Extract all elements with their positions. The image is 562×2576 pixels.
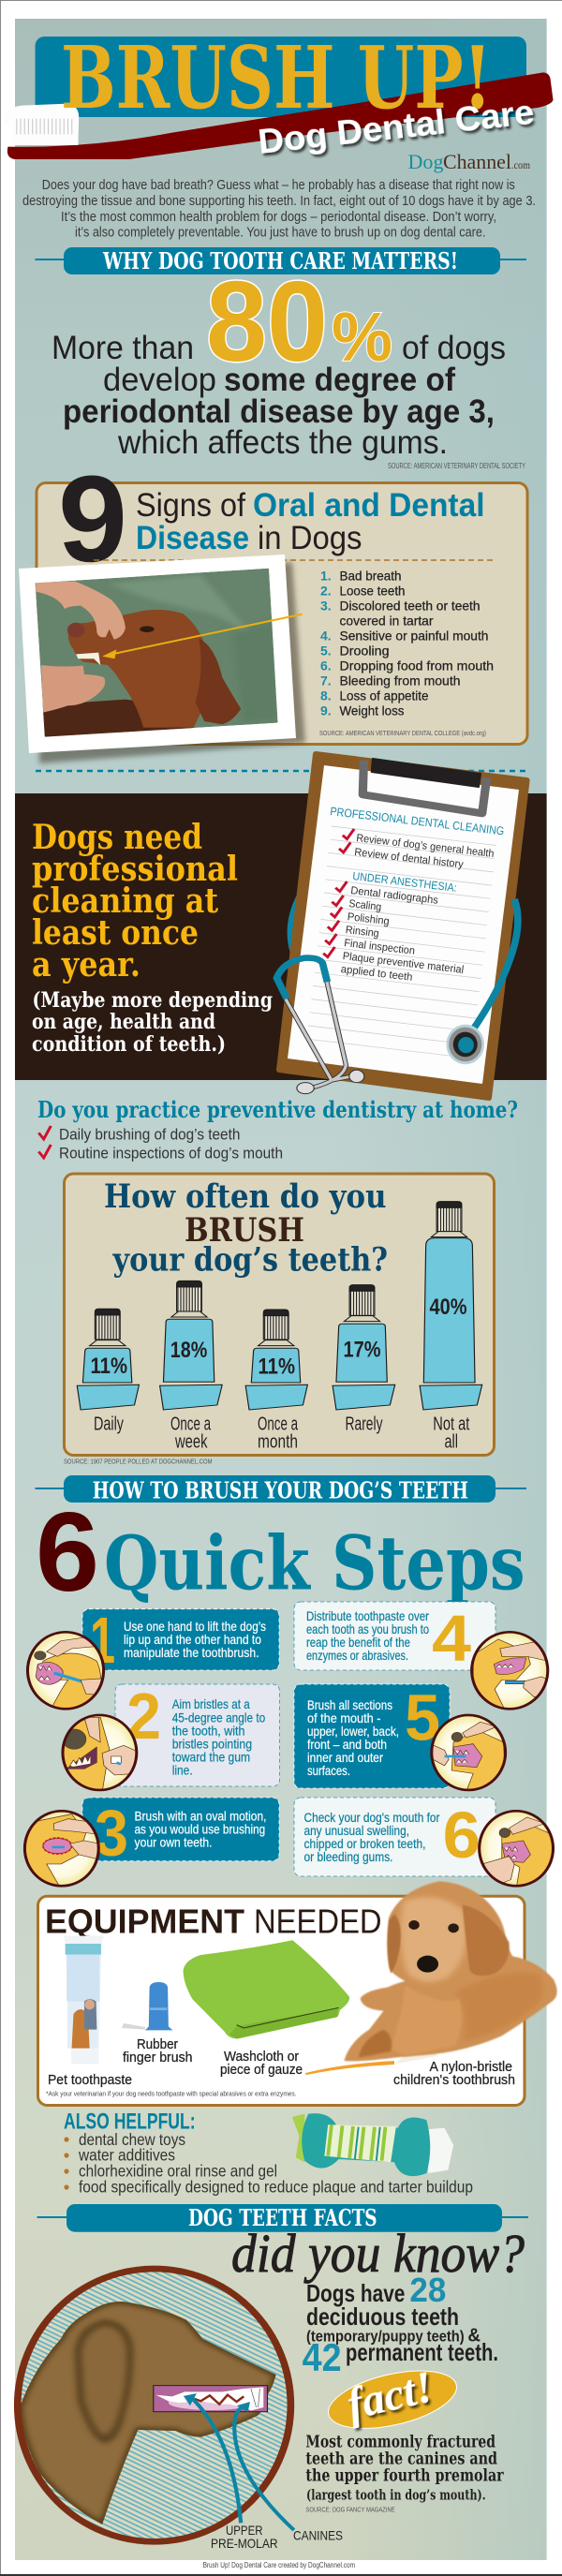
chart labels: Rarely [345,1414,382,1435]
chart labels [94,1414,470,1452]
list of signs: 4. [320,628,332,643]
statistic: 80 percent: which affects the gums. [117,424,448,461]
icon: step 4 dog [471,1632,549,1711]
step 4: Distribute toothpaste over [306,1608,429,1623]
step 3: as you would use brushing [135,1822,265,1837]
checklist text: Dental radiographs [350,885,439,907]
icon: step 1 dog [27,1632,106,1711]
text block: also helpful: water additives [78,2146,175,2165]
dashed divider [36,770,526,772]
logo: DogChannel.com: Dog [408,150,444,173]
mouth and teeth [154,2386,267,2412]
step 6: 6 [443,1799,481,1872]
heading: did you know: did you know? [231,2223,525,2284]
text block: also helpful: ALSO HELPFUL: [64,2109,196,2134]
equipment labels: finger brush [123,2050,193,2065]
icons: brushing illustrations [22,1632,555,1889]
icon: stethoscope tube behind clipboard [290,897,300,955]
list of signs: Loose teeth [339,583,405,598]
step 2: the tooth, with [172,1723,244,1738]
list of signs: 5. [320,643,332,658]
tooth labels: CANINES [293,2528,343,2543]
text: yearly cleaning message: condition of teeth.) [32,1032,226,1057]
step 4: each tooth as you brush to [306,1621,429,1636]
icon: toothbrush [4,72,554,159]
footer credit: Brush Up! Dog Dental Care created by DogChannel.com [203,2561,355,2569]
text block: also helpful: food specifically designed to reduce plaque and tarter buildup [79,2178,473,2197]
list of signs: 6. [320,658,332,673]
text block: fractured teeth: (largest tooth in dog’s mouth). [306,2487,486,2503]
step 6: or bleeding gums. [303,1849,393,1864]
icon: dental chew toy [292,2113,453,2176]
source note: SOURCE: DOG FANCY MAGAZINE [305,2506,395,2514]
ruled lines [307,826,496,1059]
step 6: chipped or broken teeth, [303,1836,425,1851]
list of signs: Dropping food from mouth [339,658,494,673]
icon: step 6 dog [479,1811,555,1889]
logo: DogChannel.com: Channel [443,150,511,173]
panel heading: EQUIPMENT [45,1902,244,1940]
step 4: 4 [432,1602,471,1675]
chart heading: BRUSH [185,1211,304,1250]
text block: also helpful [64,2109,473,2197]
title band [36,37,526,117]
step 3: your own teeth. [135,1835,212,1850]
panel: nine signs [37,450,527,744]
text block: also helpful: dental chew toys [79,2130,185,2149]
step 1: Use one hand to lift the dog’s [124,1619,266,1634]
text block: teeth counts: permanent teeth. [346,2338,498,2366]
text block: fractured teeth: teeth are the canines and [305,2450,497,2469]
intro text [22,178,536,240]
checklist: home dentistry: Daily brushing of dog’s teeth [59,1126,240,1144]
step 1: manipulate the toothbrush. [124,1645,259,1660]
text block: teeth counts: 42 [303,2335,342,2379]
step 1: lip up and the other hand to [124,1632,261,1647]
list of signs: 8. [320,688,332,703]
chart labels: month [258,1431,298,1452]
icon: step 5 dog [430,1714,506,1792]
text: yearly cleaning message: on age, health and [32,1010,215,1034]
photo: puppy [344,1881,557,2061]
text block: teeth counts: Dogs have [306,2279,405,2307]
statistic: 80 percent: of dogs [402,330,506,366]
text: yearly cleaning message [32,818,273,1057]
red check marks [323,829,354,957]
text: yearly cleaning message: Dogs need [32,818,202,857]
arrows: pointing to teeth [185,2394,294,2530]
chart labels: Once a [258,1414,299,1435]
text block: teeth counts: (temporary/puppy teeth) [306,2327,465,2345]
checklist text: applied to teeth [340,964,413,984]
step 3 [82,1797,279,1870]
heading text: Disease [136,520,249,556]
heading text: Signs of [136,487,245,524]
checklist: home dentistry [38,1126,283,1162]
text block: fractured teeth: the upper fourth premolar [305,2467,504,2486]
tube: once a month 11 percent: 11% [259,1355,295,1379]
illustration: dog profile with teeth [18,2269,294,2541]
checklist text: Polishing [347,911,390,927]
tube: rarely 17 percent: 17% [343,1338,380,1362]
source note: SOURCE: AMERICAN VETERINARY DENTAL COLLEGE (avdc.org) [319,729,486,737]
list of signs: 9. [320,703,332,718]
equipment labels: piece of gauze [220,2063,303,2078]
icon: stethoscope [276,899,518,1094]
step 6: any unusual swelling, [303,1823,409,1838]
list of signs: Discolored teeth or teeth [339,598,480,613]
tooth labels [211,2523,343,2551]
panel heading: NEEDED [254,1902,382,1940]
step 6 [294,1798,495,1876]
text block: fractured teeth [305,2434,504,2503]
panel heading [45,1902,382,1940]
tube: not at all 40 percent: 40% [429,1295,466,1320]
step 5: upper, lower, back, [307,1724,399,1739]
panel: how often chart [64,1174,495,1456]
heading number 9: 9 [58,450,127,587]
icon: step 2 dog [61,1714,138,1792]
header: title with toothbrush [4,27,554,161]
intro text: it’s also completely preventable. You just have to brush up on dog dental care. [75,225,485,240]
badge: fact [323,2361,462,2439]
tube: daily 11 percent: 11% [90,1354,127,1379]
logo: DogChannel.com [408,150,531,173]
statistic: 80 percent [52,258,506,461]
tube: daily 11 percent [77,1309,139,1410]
equipment labels: children's toothbrush [393,2073,515,2088]
statistic: 80 percent: some degree of [224,362,455,398]
list of signs: Bad breath [339,568,401,583]
chart heading: your dog’s teeth? [112,1241,388,1280]
illustration: clipboard with checklist [279,754,527,1098]
equipment labels: Rubber [137,2037,178,2052]
statistic: 80 percent: % [332,298,392,376]
icon: children's toothbrush [304,2044,437,2075]
section heading: why dog tooth care matters: WHY DOG TOOTH CARE MATTERS! [102,247,458,274]
section heading: how to brush: HOW TO BRUSH YOUR DOG’S TEETH [93,1476,468,1503]
step 5 [294,1681,450,1788]
statistic: 80 percent: periodontal disease by age 3, [63,393,495,430]
logo: DogChannel.com: .com [511,158,531,171]
tube: rarely 17 percent [333,1285,395,1410]
text block: teeth counts: deciduous teeth [306,2302,459,2331]
heading text: in Dogs [258,520,362,556]
step 2: Aim bristles at a [172,1696,250,1711]
badge: fact: fact! [343,2361,437,2430]
heading text [136,487,485,556]
tube: once a month 11 percent [245,1310,307,1410]
list of signs [320,568,494,718]
arrow: pointing to discolored tooth [102,614,303,659]
list of signs: covered in tartar [339,613,434,628]
text: yearly cleaning message: least once [32,913,199,953]
list of signs: 2. [320,583,332,598]
checklist text: UNDER ANESTHESIA: [352,869,458,895]
chart heading [104,1177,388,1280]
photo: dog having teeth inspected [19,555,305,763]
step 2 [115,1680,279,1786]
equipment labels [48,2037,515,2088]
step 2: toward the gum [172,1749,250,1764]
panel: equipment needed [37,1881,557,2106]
footnote: *Ask your veterinarian if your dog needs toothpaste with special abrasives or extra enzymes. [46,2091,297,2097]
step 4 [294,1602,495,1675]
text: yearly cleaning message: a year. [32,945,140,985]
equipment labels: Pet toothpaste [48,2073,132,2088]
list of signs: 7. [320,673,332,688]
checklist text: Review of dog’s general health [356,833,495,860]
step 2: line. [172,1762,193,1777]
chart heading: How often do you [104,1177,386,1216]
checklist text: Rinsing [345,925,379,940]
text block: teeth counts: 28 [409,2271,446,2309]
checklist text: Final inspection [344,938,416,957]
step 6: Check your dog's mouth for [303,1810,440,1825]
tooth labels: PRE-MOLAR [211,2536,278,2551]
list of signs: Sensitive or painful mouth [339,628,489,643]
tooth labels: UPPER [226,2523,262,2538]
list of signs: Bleeding from mouth [339,673,461,688]
statistic: 80 percent: develop [103,362,216,398]
chart labels: Not at [433,1414,470,1435]
text block: fractured teeth: Most commonly fractured [305,2434,495,2452]
heading: six quick steps: 6 [36,1489,99,1615]
step 2: 45-degree angle to [172,1710,265,1725]
step 5: surfaces. [307,1763,350,1778]
list of signs: Loss of appetite [339,688,429,703]
step 1 [82,1604,279,1677]
step 5: 5 [405,1681,440,1754]
step 4: enzymes or abrasives. [306,1648,408,1663]
source note: SOURCE: 1907 PEOPLE POLLED AT DOGCHANNEL.COM [64,1458,212,1466]
step 5: of the mouth - [307,1710,381,1725]
checklist: home dentistry: Routine inspections of dog’s mouth [59,1145,283,1162]
text block: also helpful: chlorhexidine oral rinse and gel [79,2162,277,2181]
step 3: 3 [95,1797,128,1870]
checklist text [330,805,505,984]
checklist text: PROFESSIONAL DENTAL CLEANING [330,805,505,837]
icon: step 3 dog [22,1811,100,1889]
text block: teeth counts [303,2271,498,2379]
step 5: inner and outer [307,1750,383,1765]
icon: pet toothpaste tube [64,1936,104,2064]
step 2: 2 [126,1680,161,1753]
icon: rubber finger brush [122,1982,172,2030]
step 1: 1 [90,1604,115,1677]
checklist text: Review of dental history [354,847,464,870]
bar chart: toothpaste tubes [77,1202,482,1452]
checklist text: Plaque preventive material [342,951,465,976]
text block: teeth counts: & [467,2325,481,2346]
chart labels: Daily [94,1414,124,1435]
panel: professional cleaning band [15,793,547,1080]
chart labels: week [174,1431,208,1452]
tube: not at all 40 percent [420,1202,482,1410]
list of signs: Drooling [339,643,390,658]
step 5: Brush all sections [307,1697,392,1712]
step 3: Brush with an oval motion, [135,1808,266,1823]
subtitle: Dog Dental Care [256,93,536,161]
checklist text: Scaling [348,898,382,913]
chart labels: Once a [170,1414,212,1435]
list of signs: 1. [320,568,332,583]
text: yearly cleaning message: cleaning at [32,881,218,921]
section heading: dog teeth facts: DOG TEETH FACTS [188,2204,377,2231]
step 2: bristles pointing [172,1736,252,1751]
text: yearly cleaning message: (Maybe more depending [32,988,273,1013]
step 4: reap the benefit of the [306,1635,410,1650]
heading text: Oral and Dental [253,487,485,524]
text: yearly cleaning message: professional [32,850,238,889]
list of signs: 3. [320,598,332,613]
intro text: It’s the most common health problem for dogs – periodontal disease. Don’t worry, [61,210,496,225]
equipment labels: A nylon-bristle [429,2060,512,2075]
step 5: front – and both [307,1737,387,1752]
statistic: 80 percent: 80 [206,258,328,385]
list of signs: Weight loss [339,703,405,718]
clip [362,759,487,813]
tube: once a week 18 percent [160,1281,222,1410]
tube: once a week 18 percent: 18% [170,1338,207,1363]
statistic: 80 percent: More than [52,330,194,366]
section heading: dog teeth facts [37,2204,528,2232]
heading: six quick steps [36,1489,525,1615]
equipment labels: Washcloth or [224,2050,299,2065]
chart labels: all [444,1431,458,1452]
icon: green washcloth [185,1942,348,2039]
